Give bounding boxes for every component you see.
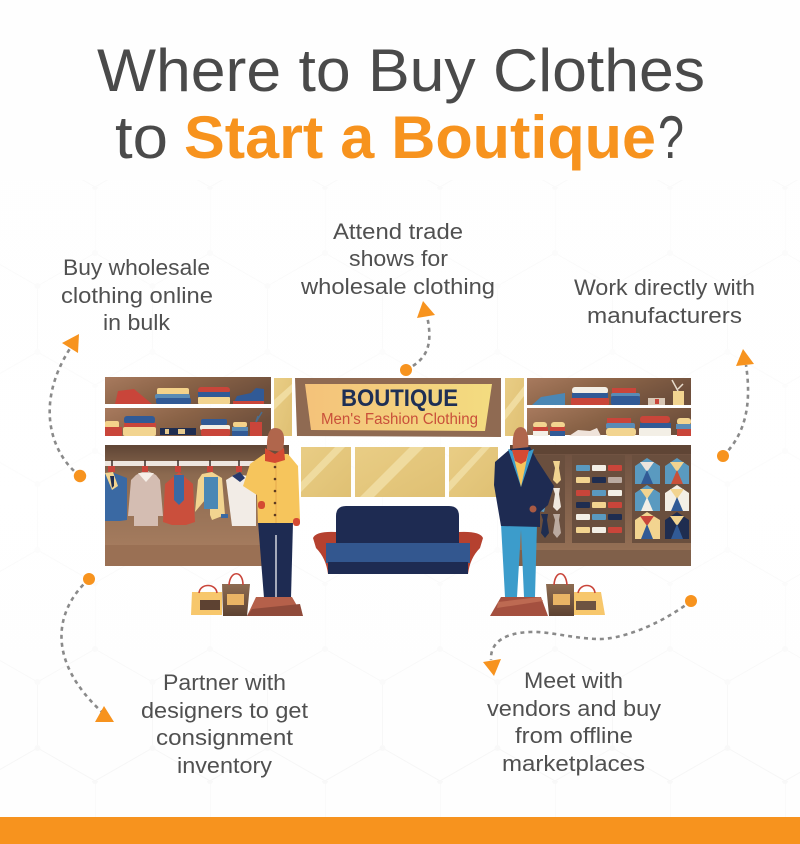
arrow: to trade shows [400, 301, 435, 376]
sofa [313, 506, 483, 574]
left mirror panel [274, 378, 292, 436]
text: meet with vendors: marketplaces [502, 751, 645, 776]
left shelves [105, 377, 271, 436]
right shopping bags [546, 574, 605, 616]
illustration: boutique storefront [105, 377, 691, 616]
text: attend trade shows [300, 219, 495, 299]
right wall display [510, 445, 691, 566]
arrow: to manufacturers [717, 349, 754, 462]
text: attend trade shows: shows for [349, 246, 449, 271]
title: Where to Buy Clothes [97, 37, 705, 104]
text: meet with vendors: vendors and buy [487, 696, 662, 721]
title [97, 37, 705, 171]
text: partner with designers: designers to get [141, 698, 309, 723]
boutique sign [295, 378, 501, 437]
title: ? [658, 104, 684, 171]
title: Start a Boutique [184, 104, 656, 171]
text: buy wholesale online [61, 255, 213, 335]
text: work with manufacturers [574, 275, 755, 328]
text: buy wholesale online: Buy wholesale [63, 255, 210, 280]
window panels [301, 447, 498, 497]
shirts on display [635, 458, 689, 539]
ties [539, 461, 561, 538]
text: meet with vendors [487, 668, 662, 776]
left mannequin [243, 428, 303, 616]
text: partner with designers: consignment [156, 725, 294, 750]
bow ties [576, 465, 622, 533]
left clothing rack [105, 445, 289, 566]
arrow: to designers [61, 573, 114, 722]
text: meet with vendors: Meet with [524, 668, 623, 693]
title: to [115, 104, 168, 171]
left shopping bags [191, 574, 250, 616]
bottom orange bar [0, 817, 800, 844]
text: buy wholesale online: in bulk [103, 310, 171, 335]
boutique sign: Men's Fashion Clothing [321, 411, 478, 428]
text: partner with designers: Partner with [163, 670, 286, 695]
text: buy wholesale online: clothing online [61, 283, 213, 308]
boutique sign: BOUTIQUE [341, 385, 458, 412]
text: partner with designers [141, 670, 309, 778]
text: meet with vendors: from offline [515, 723, 633, 748]
text: work with manufacturers: manufacturers [587, 303, 742, 328]
text: attend trade shows: wholesale clothing [300, 274, 495, 299]
right mirror panel [505, 378, 524, 436]
right mannequin [490, 427, 554, 616]
arrow: to buy wholesale [50, 334, 86, 482]
text: work with manufacturers: Work directly with [574, 275, 755, 300]
text: attend trade shows: Attend trade [333, 219, 463, 244]
arrow: to vendors [483, 595, 697, 676]
right shelves [527, 378, 691, 436]
text: partner with designers: inventory [177, 753, 273, 778]
